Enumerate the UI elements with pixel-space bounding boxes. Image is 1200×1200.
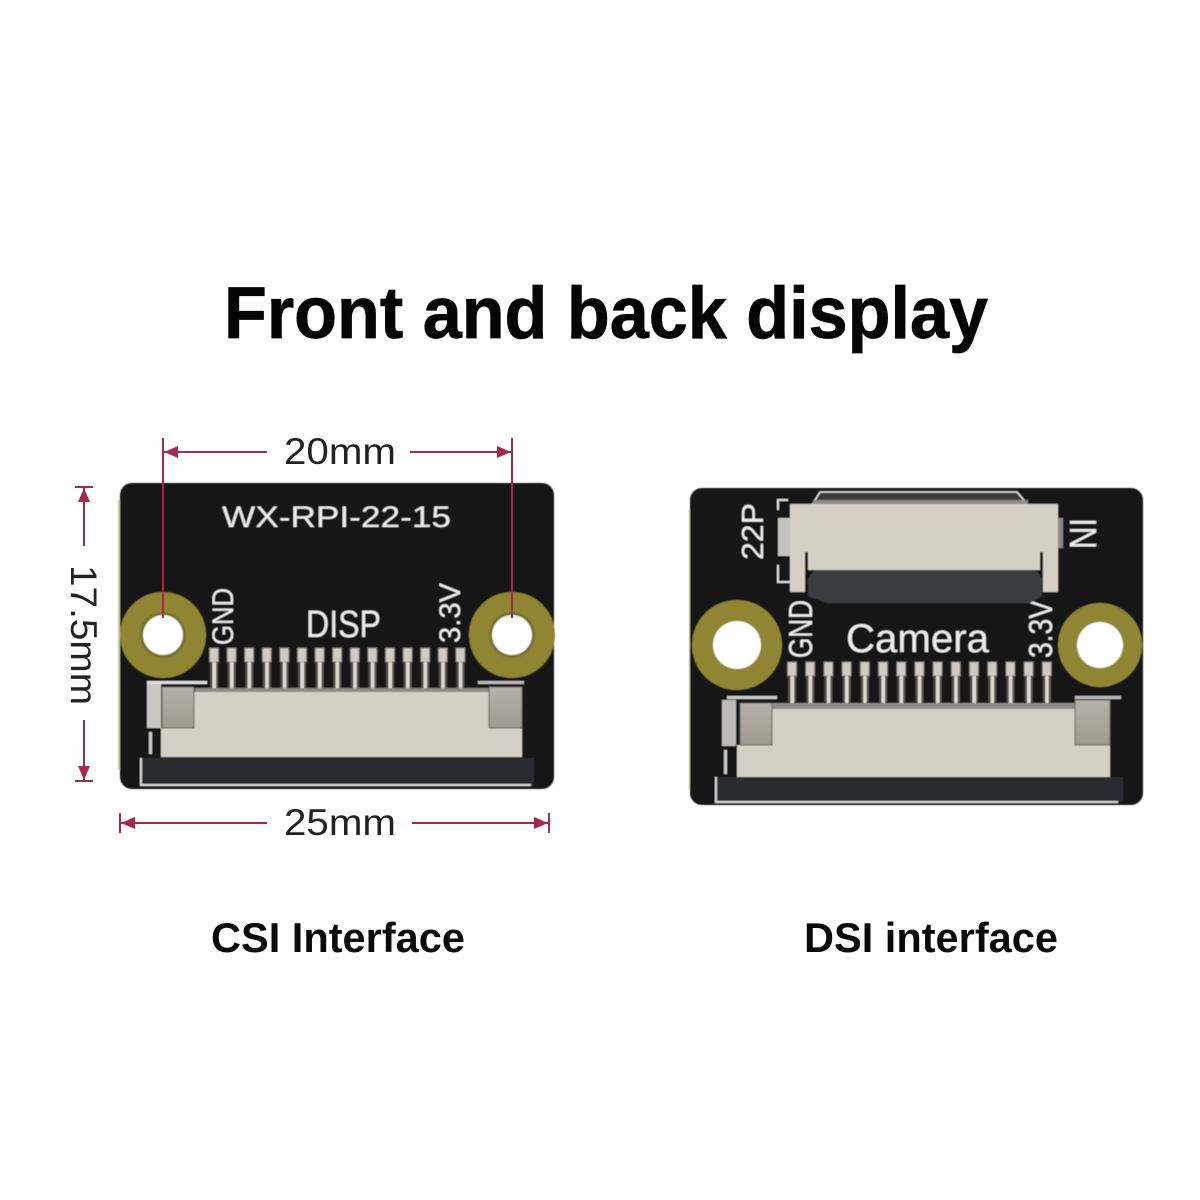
dimension: 25mm xyxy=(120,802,549,843)
mounting hole: left xyxy=(692,600,782,690)
upper FPC connector xyxy=(778,492,1063,603)
mounting hole: left xyxy=(120,592,206,678)
dimension: 25mm: 25mm xyxy=(284,802,396,843)
caption: DSI interface: DSI interface xyxy=(804,914,1058,961)
silkscreen 22P: 22P xyxy=(735,503,770,560)
panel: DSI board xyxy=(689,488,1143,805)
dimension: 20mm xyxy=(163,431,512,618)
silkscreen 3.3V: 3.3V xyxy=(1022,600,1059,658)
dimension: 17.5mm xyxy=(63,487,104,781)
dimension: 17.5mm: 17.5mm xyxy=(63,565,104,705)
mounting hole: right xyxy=(469,592,555,678)
board photo: CSI xyxy=(118,483,555,789)
contact pins xyxy=(210,648,465,690)
title: Front and back display xyxy=(224,273,988,354)
silkscreen GND: GND xyxy=(207,588,240,645)
dimension: 20mm: 20mm xyxy=(284,431,396,472)
silkscreen 3.3V: 3.3V xyxy=(434,583,467,643)
silkscreen model: WX-RPI-22-15 xyxy=(222,501,451,534)
silkscreen IN: IN xyxy=(1061,518,1103,549)
panel: CSI board with dimensions xyxy=(63,431,555,843)
contact pins xyxy=(788,662,1051,704)
silkscreen GND: GND xyxy=(782,600,819,658)
mounting hole: right xyxy=(1058,603,1142,687)
silkscreen DISP: DISP xyxy=(306,604,381,646)
caption: CSI interface: CSI Interface xyxy=(211,914,465,961)
silkscreen Camera: Camera xyxy=(846,617,990,661)
lower FPC connector xyxy=(716,696,1123,802)
FPC connector xyxy=(141,681,534,785)
